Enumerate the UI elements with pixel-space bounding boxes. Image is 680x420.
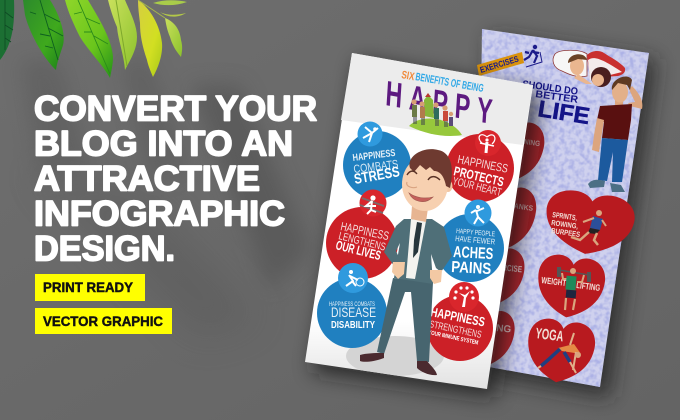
- icon: heart person: [479, 135, 495, 153]
- card sheet: [305, 53, 533, 389]
- circle: protects your heart: YOUR HEART: [451, 175, 503, 199]
- heart: yoga: [523, 316, 598, 387]
- headline: CONVERT YOUR: [34, 90, 317, 128]
- back heading: LIFE: [536, 95, 592, 129]
- icon: sprinter: [571, 210, 606, 245]
- circle: disease and disability: HAPPINESS COMBATS: [329, 302, 375, 308]
- man shoes: [360, 353, 437, 375]
- man hands: [392, 262, 442, 284]
- heart: planks: [473, 182, 539, 254]
- icon: jumping person: [363, 127, 378, 142]
- heart: planks: PLANKS: [505, 200, 534, 213]
- headline: [34, 90, 317, 268]
- header band: [341, 53, 533, 145]
- heart: jogging: NG: [496, 323, 512, 336]
- circle: aches and pains: HAVE FEWER: [455, 234, 496, 246]
- circle: strengthens immune system: STRENGTHENS: [428, 319, 483, 341]
- heart: running: [482, 117, 547, 186]
- circle: combats stress: HAPPINESS: [352, 148, 396, 164]
- badge: vector graphic: VECTOR GRAPHIC: [43, 314, 163, 329]
- back heading: BETTER: [535, 89, 580, 106]
- leaf shadows: [20, 60, 310, 340]
- badge: print ready: PRINT READY: [43, 280, 133, 295]
- circle: combats stress: STRESS: [353, 164, 401, 188]
- exercises ribbon: EXERCISES: [479, 54, 520, 75]
- circle: lengthens our lives: LENGTHENS: [337, 230, 387, 254]
- headline: DESIGN.: [34, 230, 175, 268]
- man legs: [377, 278, 433, 362]
- circle: strengthens immune system: HAPPINESS: [429, 304, 487, 329]
- icon: person stretching: [471, 205, 484, 224]
- panel: front infographic card: [305, 53, 533, 389]
- circle: lengthens our lives: HAPPINESS: [339, 219, 390, 243]
- circle: lengthens our lives: OUR LIVES: [334, 237, 383, 263]
- illustration: smiling man in suit: [360, 149, 452, 375]
- heart: sprints rowing burpees: ROWING,: [551, 218, 579, 231]
- heart: exercise: EXERCISE: [489, 261, 523, 274]
- heart: sprints rowing burpees: [541, 187, 637, 260]
- icon: person on bench: [360, 195, 384, 214]
- back card shadow: [488, 35, 657, 398]
- headline: BLOG INTO AN: [34, 124, 293, 164]
- badge: vector graphic: [35, 308, 172, 334]
- heart: weight lifting: WEIGHT: [541, 275, 567, 288]
- illustration: man in red shirt: [588, 77, 642, 192]
- circle: protects your heart: [446, 130, 514, 202]
- heart: running: RUNNING: [510, 135, 541, 148]
- leaves: [0, 0, 187, 78]
- icon: yoga pose: [538, 333, 581, 373]
- circle: disease and disability: DISEASE: [331, 304, 376, 320]
- circle: aches and pains: [436, 200, 504, 282]
- front title: HAPPY: [384, 74, 494, 132]
- badge: print ready: [35, 274, 145, 301]
- circle: disease and disability: DISABILITY: [331, 320, 375, 331]
- circle: combats stress: [343, 122, 411, 199]
- icon: weightlifter: [557, 267, 591, 310]
- circle: aches and pains: HAPPY PEOPLE: [456, 228, 496, 238]
- thought bubble: couple: [553, 50, 625, 87]
- icon: runner: [524, 45, 542, 67]
- headline: INFOGRAPHIC: [34, 194, 285, 234]
- icon: person with wheelchair: [346, 270, 364, 286]
- heart: sprints rowing burpees: BURPEES: [551, 226, 581, 239]
- figure floor shadow: [346, 336, 444, 376]
- circle: strengthens immune system: [427, 282, 493, 361]
- heart: jogging: [458, 306, 517, 370]
- man shirt and tie: [406, 219, 426, 279]
- circle: aches and pains: PAINS: [451, 259, 492, 278]
- front title: SIX: [400, 69, 416, 83]
- circle: lengthens our lives: [326, 190, 398, 279]
- headline: ATTRACTIVE: [34, 160, 260, 198]
- heart: weight lifting: LIFTING: [576, 280, 601, 293]
- man head: [402, 149, 452, 222]
- heart: weight lifting: [533, 252, 608, 322]
- front card shadow: [312, 60, 541, 398]
- icon: tree person: [453, 286, 475, 307]
- circle: protects your heart: HAPPINESS: [456, 152, 509, 176]
- front title: BENEFITS OF BEING: [414, 71, 485, 95]
- heart: yoga: YOGA: [535, 325, 564, 345]
- circle: strengthens immune system: YOUR IMMUNE SYSTEM: [428, 330, 479, 347]
- illustration: happy family: [409, 93, 462, 136]
- circle: disease and disability: [317, 263, 387, 348]
- circle: protects your heart: PROTECTS: [452, 163, 506, 189]
- card sheet: [478, 29, 649, 387]
- circle: combats stress: COMBATS: [353, 159, 399, 176]
- back heading: SHOULD DO: [522, 79, 579, 98]
- man jacket and arms: [384, 219, 452, 284]
- heart: exercise: [464, 243, 527, 310]
- back heading: [522, 79, 592, 129]
- heart: sprints rowing burpees: SPRINTS,: [552, 210, 578, 222]
- circle: aches and pains: ACHES: [453, 244, 494, 263]
- panel: back infographic card: [458, 29, 649, 387]
